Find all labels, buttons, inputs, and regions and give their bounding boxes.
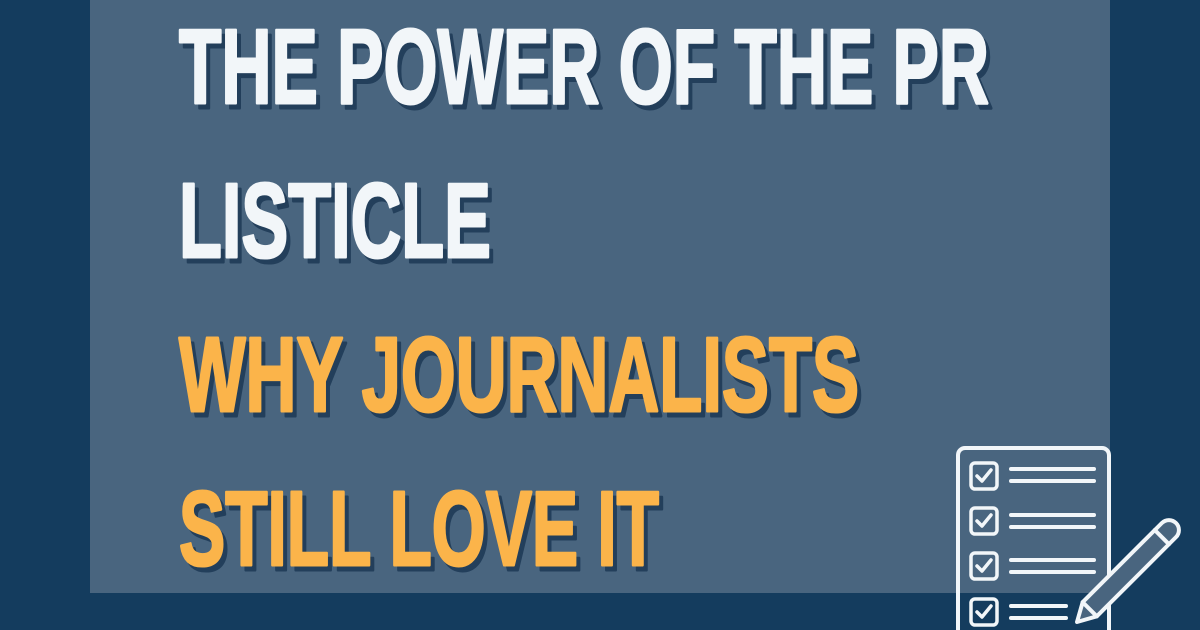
heading line 2: LISTICLE [179, 162, 491, 280]
heading line 2 [179, 162, 495, 285]
subheading line 1: WHY JOURNALISTS [183, 321, 863, 439]
icon: checklist with pencil [958, 448, 1183, 630]
subheading line 1 [179, 316, 863, 439]
title [179, 8, 993, 593]
subheading line 1: WHY JOURNALISTS [179, 316, 859, 434]
icon: pencil [1070, 516, 1183, 629]
subheading line 2 [179, 470, 663, 593]
subheading line 2: STILL LOVE IT [183, 475, 663, 593]
heading line 2: LISTICLE [183, 167, 495, 285]
subheading line 2: STILL LOVE IT [179, 470, 659, 588]
